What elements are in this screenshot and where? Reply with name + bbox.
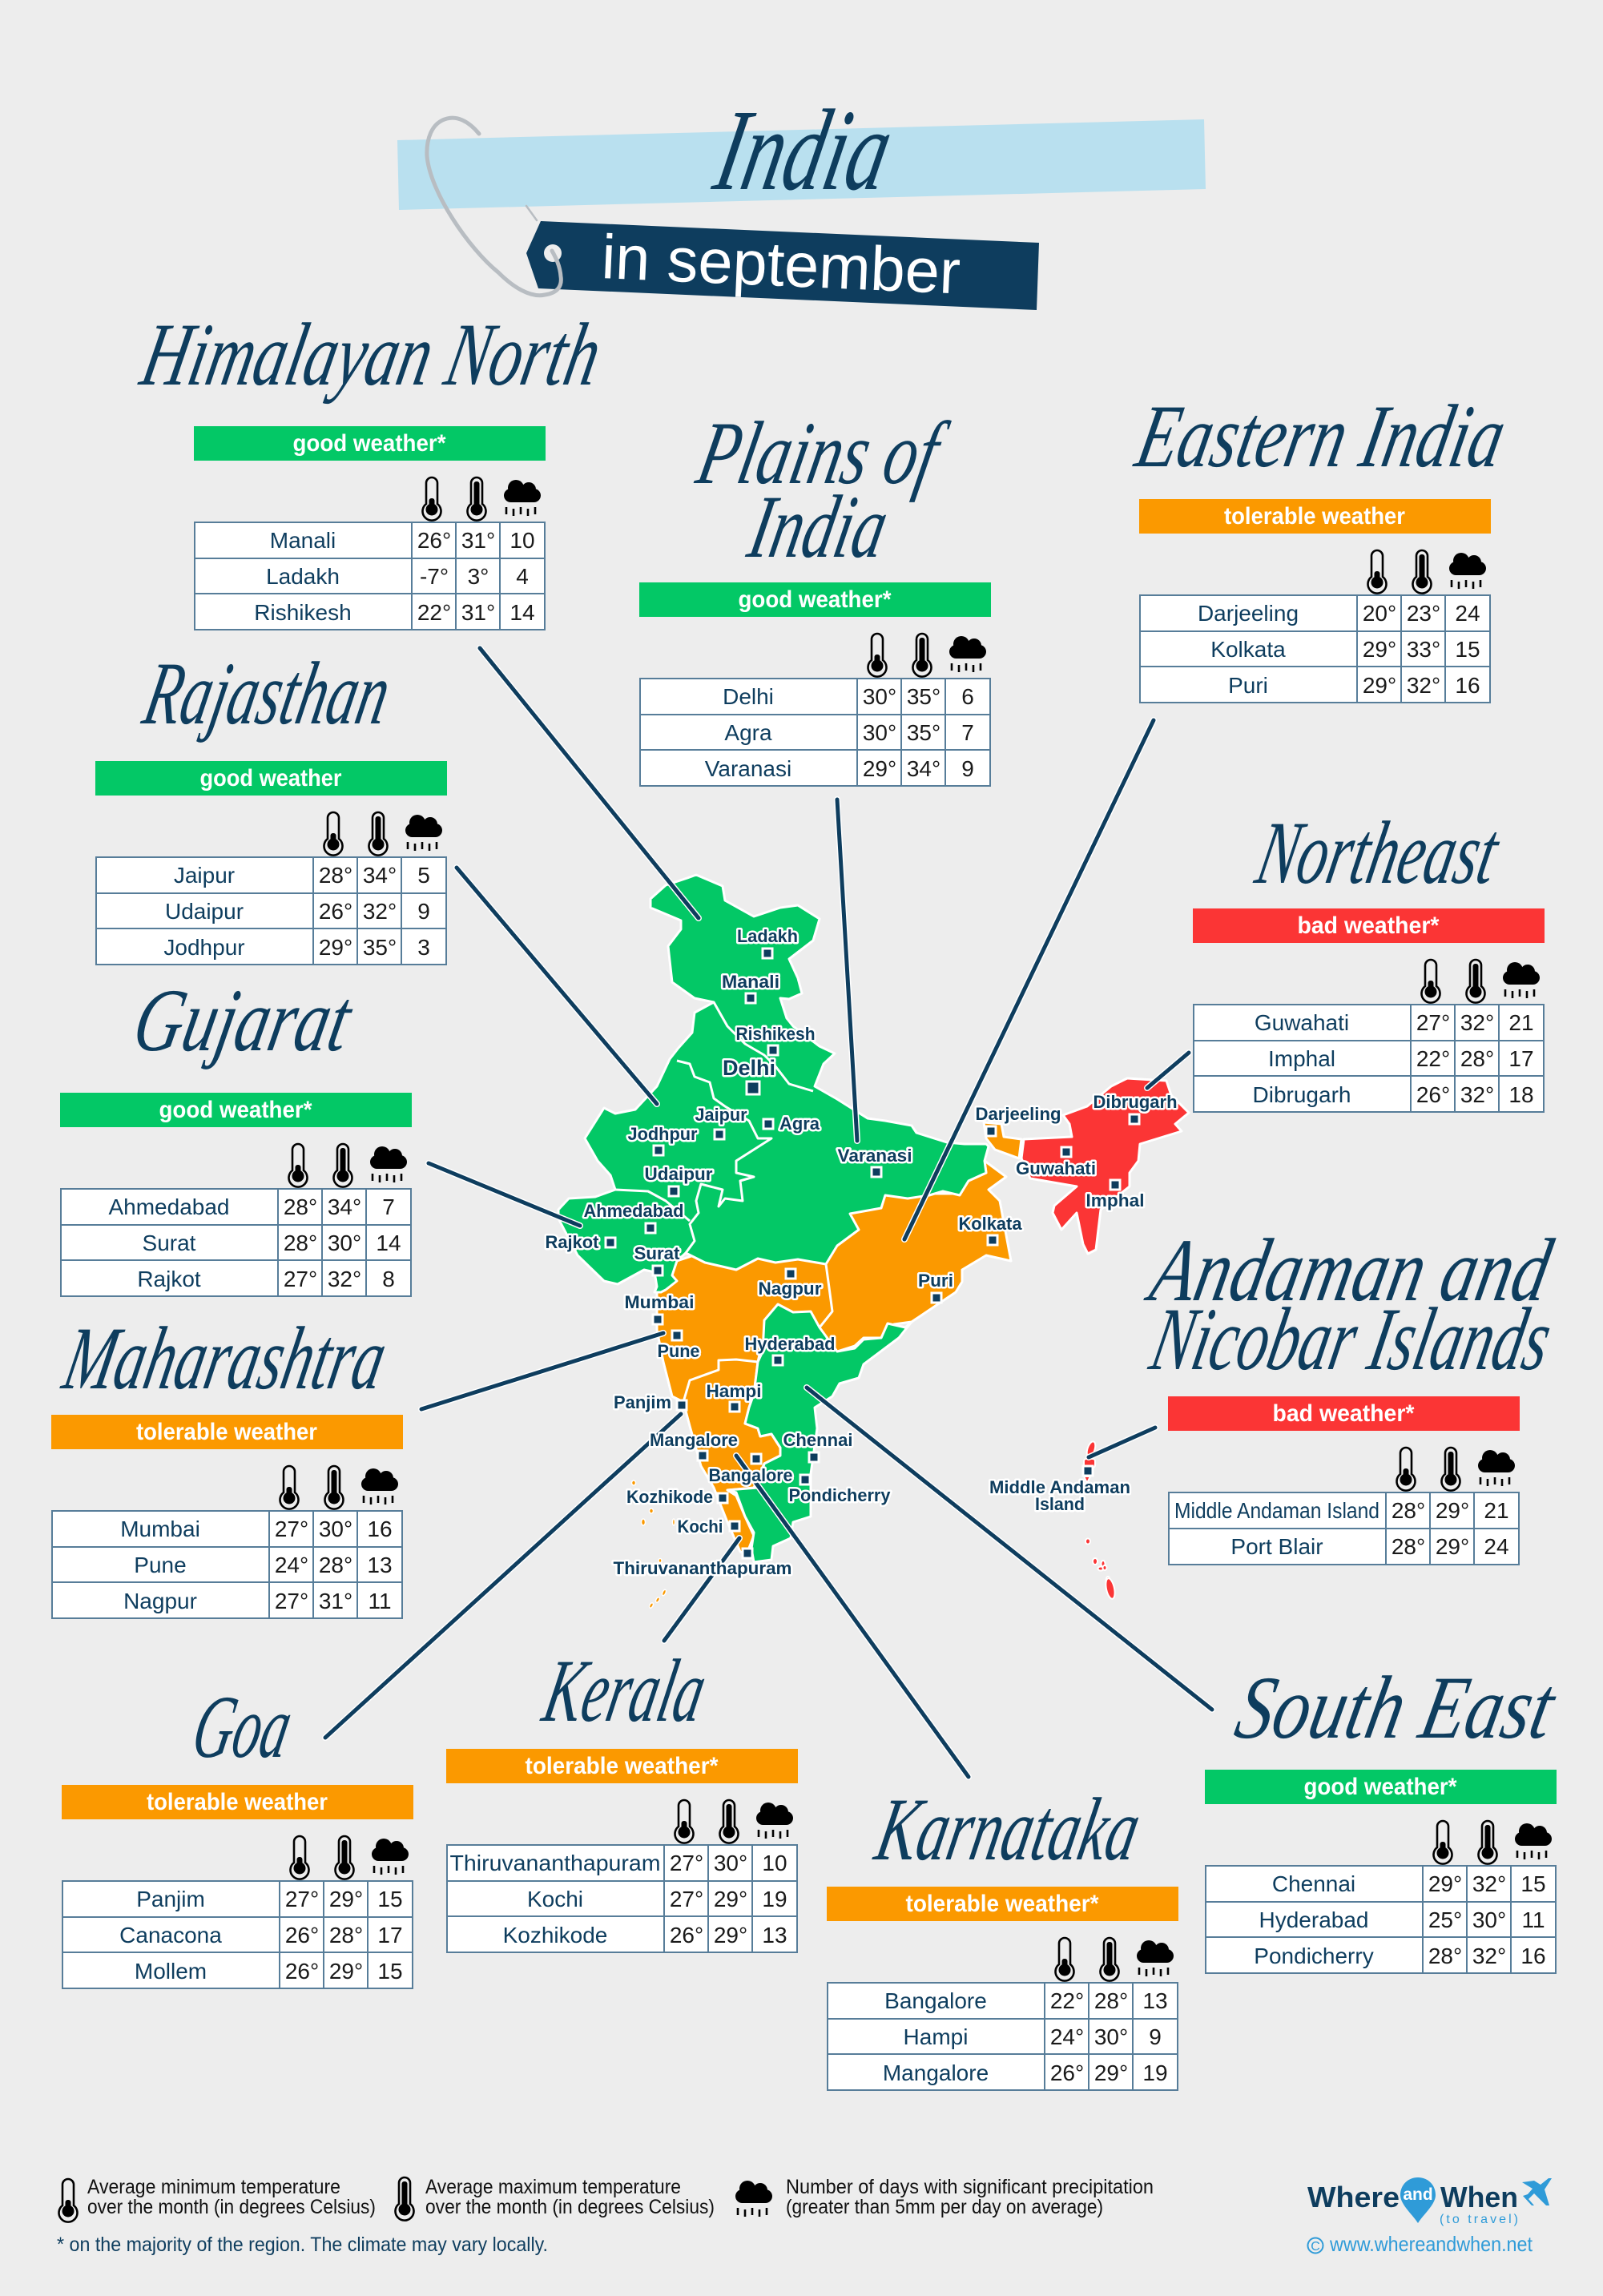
table: Maharashtra climate: 16	[367, 1517, 393, 1541]
table: Maharashtra climate: 27°	[275, 1517, 308, 1541]
city labels on the map: Jodhpur	[628, 1124, 698, 1144]
city labels on the map: Pondicherry	[788, 1485, 891, 1505]
banner: tolerable weather	[827, 1887, 1178, 1921]
city labels on the map: Thiruvananthapuram	[614, 1558, 791, 1578]
table: Kerala climate: Kozhikode	[503, 1923, 607, 1948]
legend: average maximum temperature: over the month (in degrees Celsius)	[425, 2196, 715, 2218]
city labels on the map: Kozhikode	[626, 1487, 713, 1507]
heading: Plains of India: India	[740, 477, 896, 577]
table: Eastern India climate: 29°	[1363, 637, 1396, 662]
table: Eastern India climate: 16	[1455, 673, 1480, 698]
subtitle tag: in september	[526, 221, 1039, 310]
table: Gujarat climate	[61, 1189, 411, 1296]
table: Gujarat climate: 30°	[328, 1231, 361, 1255]
table: Gujarat climate: 27°	[284, 1267, 317, 1291]
banner: tolerable weather: tolerable weather	[136, 1419, 317, 1445]
table: Plains of India climate: 7	[961, 720, 974, 745]
table: Maharashtra climate: 30°	[319, 1517, 352, 1541]
table: Rajasthan climate	[96, 857, 446, 965]
table: Plains of India climate: 29°	[863, 756, 896, 781]
table: Karnataka climate: 9	[1149, 2024, 1162, 2049]
table: South East climate: Hyderabad	[1259, 1907, 1368, 1932]
table: Rajasthan climate: Jaipur	[174, 863, 235, 888]
icons: temperature and rain	[1056, 1938, 1174, 1981]
map of India	[558, 875, 1189, 1609]
table: Northeast climate: 26°	[1416, 1082, 1450, 1107]
table: Kerala climate: 29°	[714, 1923, 747, 1948]
table: Eastern India climate: 24	[1455, 601, 1480, 626]
city labels on the map: Mangalore	[650, 1430, 738, 1450]
table: Gujarat climate: Rajkot	[137, 1267, 201, 1291]
map region: green southeast states	[727, 1304, 912, 1562]
heading: Goa: Goa	[185, 1678, 300, 1777]
table: Karnataka climate: Bangalore	[884, 1988, 987, 2013]
city labels on the map: Pune	[657, 1341, 700, 1361]
banner: tolerable weather	[446, 1749, 798, 1783]
legend: average minimum temperature: Average minimum temperature	[87, 2176, 340, 2198]
banner: good weather: good weather	[200, 765, 342, 792]
table: Northeast climate: 27°	[1416, 1010, 1450, 1035]
banner: tolerable weather	[51, 1415, 403, 1449]
table: Himalayan North climate: 26°	[417, 528, 451, 553]
table: Karnataka climate: 19	[1142, 2060, 1168, 2085]
table: Plains of India climate: 9	[961, 756, 974, 781]
table: Plains of India climate: 35°	[907, 720, 940, 745]
table: Kerala climate: 30°	[714, 1851, 747, 1875]
city labels on the map: Middle Andaman	[989, 1477, 1130, 1497]
heading: Maharashtra: Maharashtra	[54, 1309, 395, 1408]
logo: Where and When: and	[1403, 2185, 1433, 2204]
table: Northeast climate: Dibrugarh	[1253, 1082, 1351, 1107]
map region: orange central and southwest states	[657, 1161, 1011, 1554]
table: Plains of India climate: 34°	[907, 756, 940, 781]
footnote: * on the majority of the region. The climate may vary locally.	[57, 2234, 548, 2256]
table: Kerala climate	[447, 1845, 797, 1952]
banner: good weather	[95, 761, 447, 796]
table: Northeast climate: 21	[1508, 1010, 1534, 1035]
table: Eastern India climate: 15	[1455, 637, 1480, 662]
heading: Kerala: Kerala	[534, 1641, 715, 1741]
table: Himalayan North climate: 4	[516, 564, 529, 589]
table: Rajasthan climate: Jodhpur	[163, 935, 245, 960]
table: Plains of India climate: Varanasi	[705, 756, 791, 781]
table: Eastern India climate: 33°	[1407, 637, 1440, 662]
city labels on the map: Rajkot	[545, 1232, 599, 1252]
table: Plains of India climate	[640, 679, 990, 786]
title: India: India	[705, 85, 904, 215]
banner: tolerable weather: tolerable weather*	[905, 1891, 1099, 1917]
panel: Andaman and Nicobar Islands	[1168, 1396, 1520, 1565]
table: South East climate: Chennai	[1272, 1871, 1355, 1896]
table: Rajasthan climate: 3	[417, 935, 430, 960]
map region: red northeast states	[1021, 1078, 1189, 1254]
table: Kerala climate: 26°	[670, 1923, 703, 1948]
city labels on the map: Darjeeling	[976, 1104, 1061, 1124]
city labels on the map: Hampi	[707, 1381, 761, 1401]
city labels on the map: Imphal	[1086, 1190, 1144, 1210]
table: Himalayan North climate: 22°	[417, 600, 451, 625]
table: Goa climate: Mollem	[135, 1959, 207, 1984]
icons: temperature and rain	[1434, 1821, 1552, 1864]
table: Eastern India climate: 29°	[1363, 673, 1396, 698]
table: Goa climate: 26°	[285, 1959, 319, 1984]
table: Goa climate: 27°	[285, 1887, 319, 1911]
table: Northeast climate: Imphal	[1268, 1046, 1335, 1071]
table: Andaman and Nicobar climate: 21	[1484, 1498, 1509, 1523]
table: Eastern India climate: Puri	[1228, 673, 1268, 698]
Lakshadweep islands	[631, 1480, 675, 1609]
city labels on the map: Panjim	[614, 1392, 671, 1412]
table: Northeast climate: 32°	[1460, 1082, 1494, 1107]
table: Goa climate: Panjim	[136, 1887, 205, 1911]
table: Goa climate: 15	[377, 1959, 403, 1984]
icons: temperature and rain	[675, 1800, 793, 1843]
table: Eastern India climate: 20°	[1363, 601, 1396, 626]
table: Maharashtra climate: Nagpur	[123, 1589, 197, 1613]
table: Karnataka climate: 28°	[1094, 1988, 1128, 2013]
table: Kerala climate: 27°	[670, 1851, 703, 1875]
table: Andaman and Nicobar climate: 29°	[1436, 1534, 1469, 1559]
logo: Where and When: (to travel)	[1440, 2213, 1518, 2226]
icons: temperature and rain	[324, 812, 442, 856]
table: Eastern India climate	[1140, 595, 1490, 703]
table: Andaman and Nicobar climate: 28°	[1392, 1498, 1425, 1523]
table: Himalayan North climate: -7°	[420, 564, 449, 589]
table: Karnataka climate: 30°	[1094, 2024, 1128, 2049]
table: Gujarat climate: 32°	[328, 1267, 361, 1291]
panel: Eastern India	[1139, 499, 1491, 703]
logo: Where and When: Where	[1307, 2181, 1400, 2213]
table: Maharashtra climate: 28°	[319, 1553, 352, 1577]
table: Andaman and Nicobar climate: 24	[1484, 1534, 1509, 1559]
panel: Maharashtra	[51, 1415, 403, 1618]
city labels on the map: Chennai	[783, 1430, 852, 1450]
table: Himalayan North climate: Ladakh	[266, 564, 340, 589]
table: Maharashtra climate: 27°	[275, 1589, 308, 1613]
map region: green north, plains, Rajasthan and Gujarat	[558, 875, 989, 1292]
table: Northeast climate: 22°	[1416, 1046, 1450, 1071]
table: Andaman and Nicobar climate: Middle Andaman Island	[1174, 1498, 1379, 1523]
city labels on the map: Nagpur	[758, 1279, 822, 1299]
city labels on the map: Ahmedabad	[583, 1201, 684, 1221]
icons: temperature and rain	[423, 477, 541, 521]
website credit: www.whereandwhen.net	[1329, 2232, 1533, 2256]
city labels on the map: Puri	[918, 1271, 953, 1291]
banner: tolerable weather: tolerable weather*	[526, 1753, 719, 1779]
table: Plains of India climate: Agra	[724, 720, 772, 745]
table: Kerala climate: 10	[762, 1851, 787, 1875]
table: Himalayan North climate	[195, 522, 545, 630]
table: Rajasthan climate: 29°	[319, 935, 352, 960]
table: Eastern India climate: 23°	[1407, 601, 1440, 626]
heading: Plains of India	[689, 404, 956, 577]
city labels on the map: Ladakh	[737, 926, 798, 946]
city labels on the map: Kochi	[678, 1517, 723, 1537]
table: Andaman and Nicobar climate	[1169, 1492, 1519, 1565]
logo: Where and When: When	[1440, 2181, 1518, 2213]
table: South East climate: 30°	[1472, 1907, 1506, 1932]
internal state borders	[615, 1002, 832, 1402]
heading: Karnataka: Karnataka	[867, 1780, 1149, 1879]
city labels on the map	[545, 926, 1178, 1578]
heading: Himalayan North: Himalayan North	[132, 305, 610, 405]
table: Kerala climate: 27°	[670, 1887, 703, 1911]
table: Himalayan North climate: 31°	[461, 600, 495, 625]
table: Gujarat climate: 28°	[284, 1194, 317, 1219]
heading: Rajasthan: Rajasthan	[135, 644, 399, 743]
banner: bad weather: bad weather*	[1272, 1400, 1415, 1427]
city labels on the map: Varanasi	[838, 1146, 912, 1166]
table: Plains of India climate: Delhi	[723, 684, 774, 709]
map region: Darjeeling orange	[984, 1122, 1021, 1158]
table: Karnataka climate: Hampi	[904, 2024, 968, 2049]
table: Goa climate: 17	[377, 1923, 403, 1948]
icons: temperature and rain	[290, 1836, 409, 1879]
city labels on the map: Manali	[722, 972, 779, 992]
table: South East climate: 29°	[1428, 1871, 1462, 1896]
heading: Gujarat: Gujarat	[126, 971, 361, 1070]
table: Plains of India climate: 6	[961, 684, 974, 709]
table: Gujarat climate: 8	[382, 1267, 395, 1291]
legend: average maximum temperature: Average maximum temperature	[425, 2176, 681, 2198]
logo: Where and When	[1307, 2177, 1552, 2226]
city labels on the map: Island	[1035, 1494, 1085, 1514]
table: Maharashtra climate: Mumbai	[120, 1517, 200, 1541]
heading: Andaman and Nicobar Islands	[1138, 1221, 1560, 1389]
banner: bad weather: bad weather*	[1298, 912, 1440, 939]
table: South East climate: 15	[1520, 1871, 1546, 1896]
icons: temperature and rain	[288, 1144, 407, 1187]
table: Plains of India climate: 35°	[907, 684, 940, 709]
city labels on the map: Delhi	[723, 1056, 775, 1080]
banner: good weather: good weather*	[739, 586, 892, 613]
heading: Plains of India: Plains of	[689, 404, 956, 503]
icons: temperature and rain	[280, 1466, 398, 1509]
table: Himalayan North climate: 10	[509, 528, 535, 553]
banner: bad weather	[1168, 1396, 1520, 1431]
legend: average minimum temperature: over the month (in degrees Celsius)	[87, 2196, 376, 2218]
table: South East climate: 16	[1520, 1944, 1546, 1968]
table: Maharashtra climate: 24°	[275, 1553, 308, 1577]
table: South East climate: 11	[1521, 1907, 1545, 1932]
panel: Gujarat	[60, 1093, 412, 1296]
table: Rajasthan climate: 34°	[363, 863, 397, 888]
table: Gujarat climate: Surat	[143, 1231, 196, 1255]
table: Rajasthan climate: 28°	[319, 863, 352, 888]
table: Goa climate: Canacona	[119, 1923, 222, 1948]
city labels on the map: Agra	[779, 1114, 820, 1134]
subtitle tag: in september: in september	[600, 221, 962, 308]
city labels on the map: Bangalore	[708, 1465, 793, 1485]
banner: good weather: good weather*	[159, 1097, 312, 1123]
table: Maharashtra climate: Pune	[134, 1553, 187, 1577]
panel: Rajasthan	[95, 761, 447, 965]
icons: temperature and rain	[1397, 1448, 1515, 1491]
banner: good weather: good weather*	[293, 430, 446, 457]
city labels on the map: Jaipur	[695, 1105, 747, 1125]
table: South East climate	[1206, 1866, 1556, 1973]
table: South East climate: 32°	[1472, 1944, 1506, 1968]
title ribbon: light blue band	[397, 119, 1206, 210]
table: South East climate: 32°	[1472, 1871, 1506, 1896]
city labels on the map: Mumbai	[625, 1292, 694, 1312]
tag ring	[427, 118, 561, 296]
table: Plains of India climate: 30°	[863, 720, 896, 745]
panel: Goa	[62, 1785, 413, 1988]
banner: good weather	[194, 426, 546, 461]
table: Gujarat climate: 7	[382, 1194, 395, 1219]
table: Karnataka climate: 22°	[1050, 1988, 1084, 2013]
table: Karnataka climate	[828, 1983, 1178, 2090]
city labels on the map: Dibrugarh	[1093, 1092, 1178, 1112]
panel: Himalayan North	[194, 426, 546, 630]
city labels on the map: Kolkata	[958, 1214, 1022, 1234]
table: Northeast climate: 17	[1508, 1046, 1534, 1071]
panel: Karnataka	[827, 1887, 1178, 2090]
banner: tolerable weather	[1139, 499, 1491, 534]
table: Andaman and Nicobar climate: 28°	[1392, 1534, 1425, 1559]
table: Maharashtra climate	[52, 1511, 402, 1618]
table: Goa climate: 15	[377, 1887, 403, 1911]
banner: tolerable weather: tolerable weather	[1224, 503, 1405, 530]
banner: tolerable weather: tolerable weather	[147, 1789, 328, 1815]
table: Maharashtra climate: 31°	[319, 1589, 352, 1613]
table: Gujarat climate: 28°	[284, 1231, 317, 1255]
city labels on the map: Rishikesh	[735, 1024, 816, 1044]
table: Northeast climate: 18	[1508, 1082, 1534, 1107]
table: Karnataka climate: Mangalore	[883, 2060, 989, 2085]
table: Goa climate: 29°	[329, 1887, 363, 1911]
legend: precipitation days: Number of days with significant precipitation	[786, 2176, 1154, 2198]
table: South East climate: 25°	[1428, 1907, 1462, 1932]
panel: Northeast	[1193, 908, 1545, 1112]
table: Northeast climate	[1194, 1005, 1544, 1112]
table: Karnataka climate: 26°	[1050, 2060, 1084, 2085]
Andaman and Nicobar islands	[1084, 1440, 1117, 1600]
panel: Plains of India	[639, 582, 991, 786]
table: Rajasthan climate: 5	[417, 863, 430, 888]
table: Kerala climate: Kochi	[527, 1887, 583, 1911]
panel: Kerala	[446, 1749, 798, 1952]
table: Northeast climate: 32°	[1460, 1010, 1494, 1035]
table: Gujarat climate: 34°	[328, 1194, 361, 1219]
table: Northeast climate: 28°	[1460, 1046, 1494, 1071]
icons: temperature and rain	[868, 634, 986, 677]
table: Rajasthan climate: 35°	[363, 935, 397, 960]
table: Himalayan North climate: Manali	[270, 528, 336, 553]
legend: average maximum temperature	[396, 2176, 715, 2221]
table: Kerala climate: Thiruvananthapuram	[450, 1851, 660, 1875]
city labels on the map: Hyderabad	[745, 1334, 835, 1354]
table: Eastern India climate: Darjeeling	[1198, 601, 1299, 626]
table: Goa climate: 26°	[285, 1923, 319, 1948]
table: Kerala climate: 13	[762, 1923, 787, 1948]
banner: good weather: good weather*	[1304, 1774, 1457, 1800]
table: Andaman and Nicobar climate: Port Blair	[1230, 1534, 1323, 1559]
banner: bad weather	[1193, 908, 1545, 943]
legend: precipitation days: (greater than 5mm per day on average)	[786, 2196, 1103, 2218]
table: Goa climate	[62, 1881, 413, 1988]
legend: average minimum temperature	[59, 2176, 376, 2222]
table: Plains of India climate: 30°	[863, 684, 896, 709]
table: Rajasthan climate: 32°	[363, 899, 397, 924]
table: Rajasthan climate: 9	[417, 899, 430, 924]
table: Eastern India climate: 32°	[1407, 673, 1440, 698]
table: Northeast climate: Guwahati	[1255, 1010, 1349, 1035]
table: Himalayan North climate: 31°	[461, 528, 495, 553]
table: Gujarat climate: Ahmedabad	[108, 1194, 230, 1219]
banner: good weather	[1205, 1770, 1557, 1804]
banner: good weather	[60, 1093, 412, 1127]
banner: good weather	[639, 582, 991, 617]
city labels on the map: Udaipur	[644, 1164, 713, 1184]
icons: temperature and rain	[1368, 550, 1486, 594]
table: Kerala climate: 19	[762, 1887, 787, 1911]
panel: South East	[1205, 1770, 1557, 1973]
table: Karnataka climate: 13	[1142, 1988, 1168, 2013]
leader lines connecting panels to regions	[325, 648, 1212, 1777]
table: Goa climate: 29°	[329, 1959, 363, 1984]
table: Rajasthan climate: Udaipur	[165, 899, 244, 924]
city labels on the map: Guwahati	[1016, 1158, 1096, 1178]
table: Karnataka climate: 24°	[1050, 2024, 1084, 2049]
table: Andaman and Nicobar climate: 29°	[1436, 1498, 1469, 1523]
website credit: C	[1311, 2240, 1320, 2254]
table: Maharashtra climate: 13	[367, 1553, 393, 1577]
table: Himalayan North climate: Rishikesh	[254, 600, 352, 625]
table: Maharashtra climate: 11	[368, 1589, 392, 1613]
table: Himalayan North climate: 3°	[468, 564, 489, 589]
table: Rajasthan climate: 26°	[319, 899, 352, 924]
city markers on the map	[606, 949, 1139, 1558]
table: Himalayan North climate: 14	[509, 600, 535, 625]
table: South East climate: 28°	[1428, 1944, 1462, 1968]
table: South East climate: Pondicherry	[1254, 1944, 1374, 1968]
city labels on the map: Surat	[634, 1243, 680, 1263]
table: Gujarat climate: 14	[376, 1231, 401, 1255]
icons: temperature and rain	[1421, 960, 1540, 1003]
table: Karnataka climate: 29°	[1094, 2060, 1128, 2085]
legend: precipitation days	[735, 2176, 1154, 2218]
table: Goa climate: 28°	[329, 1923, 363, 1948]
banner: tolerable weather	[62, 1785, 413, 1819]
table: Kerala climate: 29°	[714, 1887, 747, 1911]
table: Eastern India climate: Kolkata	[1210, 637, 1286, 662]
